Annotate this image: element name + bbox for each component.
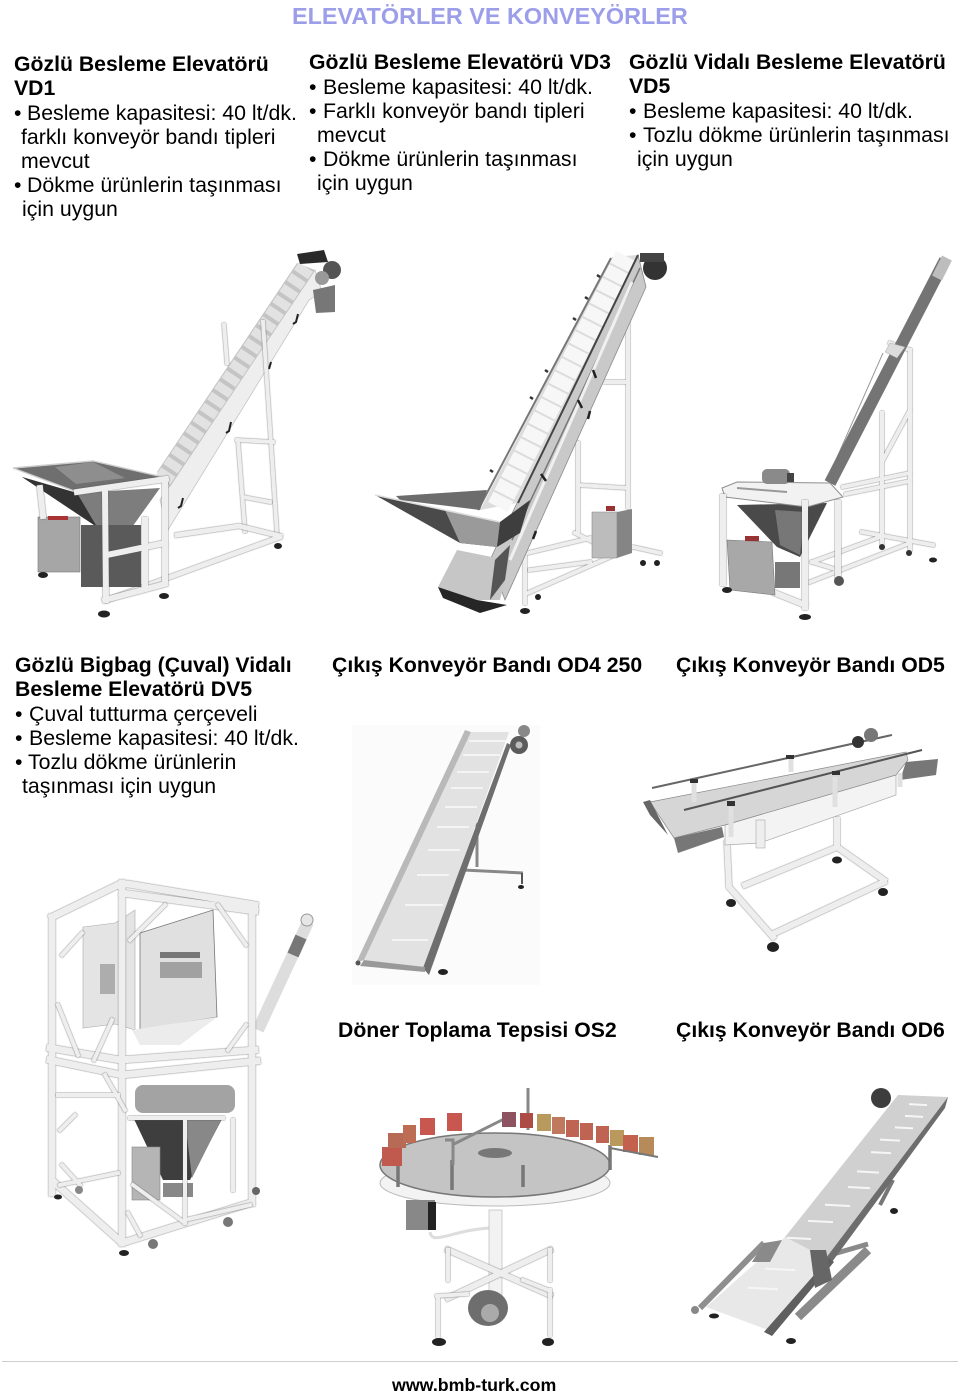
text block: VD1: Dökme ürünlerin taşınması: [27, 173, 281, 197]
machine: DV5 bigbag elevator: [50, 883, 313, 1256]
text block: VD3: Gözlü Besleme Elevatörü VD3: [309, 51, 611, 74]
machine: OD5 conveyor: [643, 728, 938, 952]
text block: VD3: mevcut: [317, 123, 386, 147]
text block: VD5: Besleme kapasitesi: 40 lt/dk.: [643, 99, 913, 123]
text block: VD3: •: [309, 99, 316, 123]
text block: DV5: Çuval tutturma çerçeveli: [29, 702, 257, 726]
text block: VD3: Farklı konveyör bandı tipleri: [323, 99, 585, 123]
heading: OD5: Çıkış Konveyör Bandı OD5: [676, 654, 945, 677]
text block: DV5: Besleme Elevatörü DV5: [15, 678, 252, 701]
text block: VD1: Gözlü Besleme Elevatörü: [14, 53, 269, 76]
text block: DV5: Tozlu dökme ürünlerin: [28, 750, 236, 774]
text block: VD1: [14, 53, 297, 221]
text block: VD1: farklı konveyör bandı tipleri: [21, 125, 276, 149]
text block: VD1: mevcut: [21, 149, 90, 173]
text block: VD3: •: [309, 147, 316, 171]
machine: OS2 rotary table: [380, 1088, 658, 1346]
text block: VD1: •: [14, 101, 21, 125]
machine: OD4 250 conveyor: [352, 725, 540, 985]
machine: OD6 conveyor: [691, 1088, 948, 1344]
text block: VD5: •: [629, 123, 636, 147]
text block: VD3: Besleme kapasitesi: 40 lt/dk.: [323, 75, 593, 99]
machine: VD1 elevator: [13, 250, 341, 618]
text block: VD3: Dökme ürünlerin taşınması: [323, 147, 577, 171]
text block: VD3: [309, 51, 611, 195]
text block: VD5: için uygun: [637, 147, 733, 171]
text block: DV5: Besleme kapasitesi: 40 lt/dk.: [29, 726, 299, 750]
text block: VD5: •: [629, 99, 636, 123]
text block: DV5: •: [15, 726, 22, 750]
text block: VD5: [629, 51, 950, 171]
text block: VD3: için uygun: [317, 171, 413, 195]
text block: DV5: [15, 654, 299, 798]
text block: VD1: •: [14, 173, 21, 197]
heading: OS2: Döner Toplama Tepsisi OS2: [338, 1019, 617, 1042]
text block: DV5: taşınması için uygun: [22, 774, 216, 798]
text block: DV5: •: [15, 750, 22, 774]
heading: OD6: Çıkış Konveyör Bandı OD6: [676, 1019, 945, 1042]
text block: VD5: VD5: [629, 75, 670, 98]
text block: VD5: Gözlü Vidalı Besleme Elevatörü: [629, 51, 946, 74]
text block: VD1: Besleme kapasitesi: 40 lt/dk.: [27, 101, 297, 125]
title: ELEVATÖRLER VE KONVEYÖRLER: [292, 3, 688, 29]
text block: VD1: VD1: [14, 77, 55, 100]
text block: DV5: •: [15, 702, 22, 726]
machine: VD5 auger elevator: [722, 258, 947, 620]
heading: OD4 250: Çıkış Konveyör Bandı OD4 250: [332, 654, 642, 677]
text block: VD1: için uygun: [22, 197, 118, 221]
text block: DV5: Gözlü Bigbag (Çuval) Vidalı: [15, 654, 292, 677]
text block: VD5: Tozlu dökme ürünlerin taşınması: [643, 123, 950, 147]
text block: VD3: •: [309, 75, 316, 99]
machine: VD3 elevator: [375, 253, 667, 614]
